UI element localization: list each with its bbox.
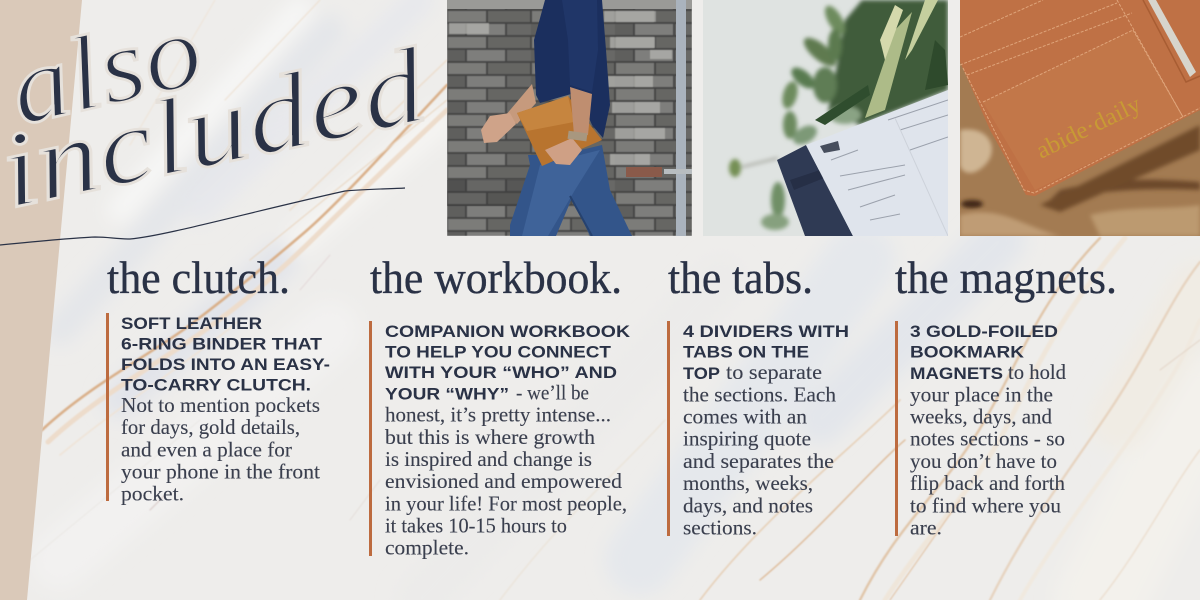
workbook text: complete. [385,536,469,560]
binder [777,145,853,236]
magnets text: to find where you [910,494,1061,518]
workbook text: honest, it’s pretty intense... [385,402,611,426]
workbook text: in your life! For most people, [385,492,627,516]
column: the clutch [106,253,330,506]
magnets text [910,322,1066,540]
workbook text: it takes 10-15 hours to [385,514,567,538]
right arm and hand [570,87,592,135]
jeans [510,145,632,236]
clutch text: SOFT LEATHER [121,314,262,333]
workbook text: TO HELP YOU CONNECT [385,342,612,362]
workbook text: YOUR “WHY” [385,384,509,404]
tabs text: sections. [683,516,757,540]
heading: the clutch: the clutch. [107,253,290,303]
shirt [534,0,610,138]
tabs text: TOP [683,364,720,383]
workbook text: WITH YOUR “WHO” AND [385,363,617,382]
workbook text: is inspired and change is [385,447,592,471]
workbook text: envisioned and empowered [385,469,622,493]
column: the workbook [369,253,631,560]
accent bar [895,321,898,536]
tabs text: comes with an [683,404,807,428]
clutch text: FOLDS INTO AN EASY- [121,355,330,374]
hand-drawn underline [0,188,405,245]
tabs text: to separate [726,360,822,384]
workbook text [385,322,631,560]
heading: the workbook: the workbook. [370,253,622,303]
accent bar [369,321,372,556]
accent bar [667,321,670,536]
column: the magnets [895,253,1117,540]
tabs text: and separates the [683,449,834,473]
clutch text: your phone in the front [121,460,320,484]
magnets text: you don’t have to [910,449,1057,473]
clutch text: TO-CARRY CLUTCH. [121,376,311,394]
tabs text: months, weeks, [683,471,813,495]
tabs text: TABS ON THE [683,342,809,362]
clutch text: and even a place for [121,438,292,462]
clutch text: pocket. [121,482,184,506]
photo: workbook and plants [703,0,948,236]
workbook page [806,90,948,236]
clutch text: Not to mention pockets [121,393,320,417]
tabs text: days, and notes [683,494,813,518]
title: also included [0,0,437,231]
heading: the tabs: the tabs. [668,253,813,303]
magnets text: your place in the [910,382,1053,406]
clutch [517,96,602,166]
column: the tabs [667,253,849,540]
magnets text: are. [910,516,942,540]
magnets text: 3 GOLD-FOILED [910,322,1058,341]
accent bar [106,313,109,501]
tabs text: inspiring quote [683,426,811,450]
clutch text: for days, gold details, [121,415,300,439]
magnets text: BOOKMARK [910,342,1025,362]
clutch text [121,314,330,506]
heading: the magnets: the magnets. [895,253,1117,303]
magnets text: to hold [1008,360,1066,384]
title line: included: included [0,25,437,231]
tabs text [683,322,849,540]
tabs text: 4 DIVIDERS WITH [683,322,849,341]
photo: leather wallet on wood [960,0,1200,236]
tabs text: the sections. Each [683,382,836,406]
left arm [505,84,536,124]
wallet logo: abide·daily [1032,91,1145,164]
workbook text: but this is where growth [385,425,595,449]
workbook text: COMPANION WORKBOOK [385,322,631,341]
magnets text: MAGNETS [910,364,1003,383]
magnets text: weeks, days, and [910,404,1052,428]
workbook text: - we’ll be [516,380,589,404]
photo: man carrying clutch [447,0,692,236]
tan side strip [0,0,82,600]
magnets text: notes sections - so [910,426,1065,450]
magnets text: flip back and forth [910,471,1065,495]
clutch text: 6-RING BINDER THAT [121,334,323,354]
